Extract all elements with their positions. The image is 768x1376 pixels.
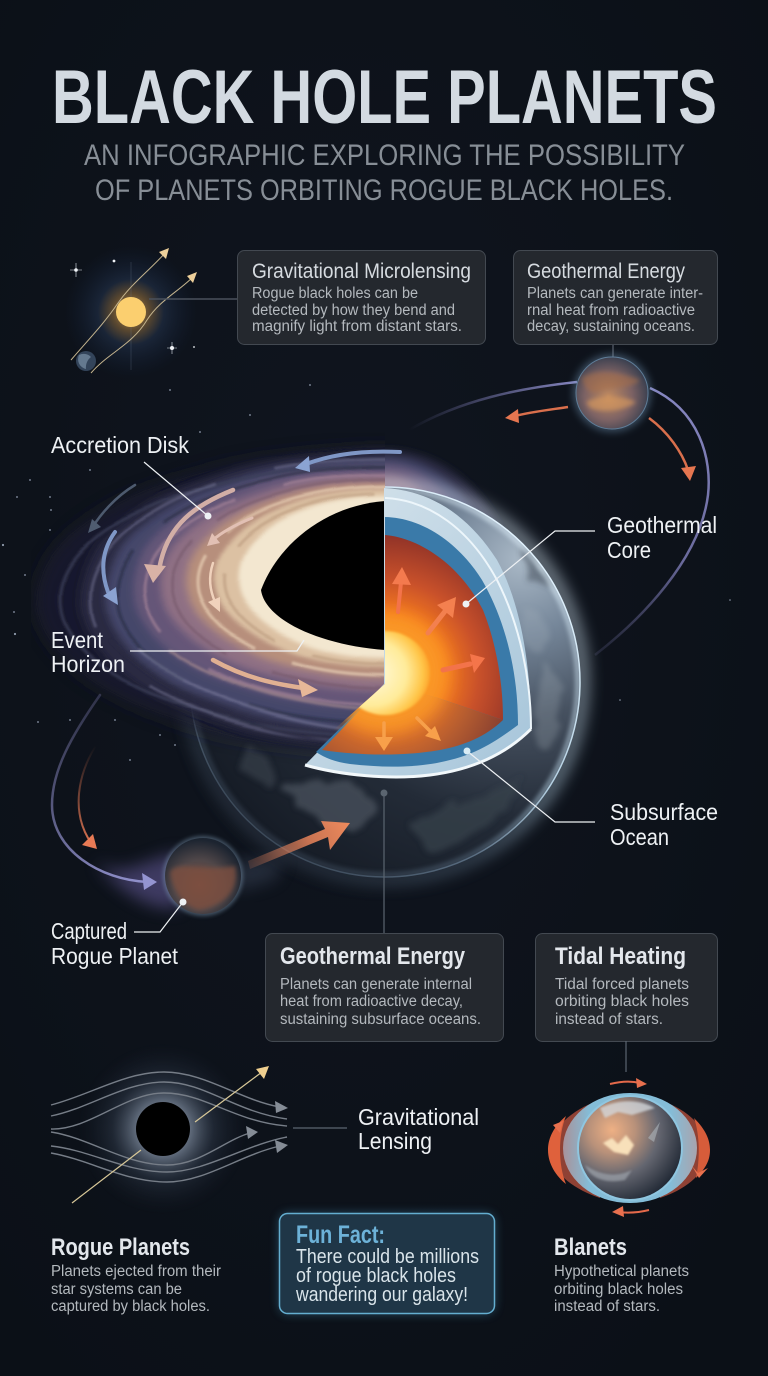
label: captured rogue planet: [51, 898, 186, 969]
panel: blanets: orbiting black holes: [554, 1281, 683, 1298]
label: event horizon: Event: [51, 627, 104, 653]
panel: tidal heating: instead of stars.: [555, 1011, 663, 1028]
arrows: core heat radiating: [375, 567, 485, 751]
panel: geothermal energy lower: Planets can generate internal: [280, 976, 472, 993]
panel: geothermal energy lower: [266, 934, 504, 1042]
cutaway: planet interior: [305, 488, 531, 777]
icon: upper planet: [573, 354, 651, 432]
panel: rogue planets: Rogue Planets: [51, 1234, 190, 1261]
panel: blanets: Blanets: [554, 1234, 627, 1261]
panel: fun fact: of rogue black holes: [296, 1265, 456, 1287]
label: subsurface ocean: Subsurface: [610, 799, 718, 825]
leader: star diagram to microlensing panel: [149, 298, 237, 300]
panel: fun fact: wandering our galaxy!: [295, 1284, 468, 1306]
leader: planet to geothermal panel: [380, 790, 388, 933]
background stars: [2, 384, 731, 761]
orbit: purple orbit around black hole: [409, 382, 709, 655]
panel: gravitational microlensing: [238, 250, 486, 344]
panel: fun fact: There could be millions: [296, 1246, 479, 1268]
panel: rogue planets: star systems can be: [51, 1281, 182, 1298]
subtitle: OF PLANETS ORBITING ROGUE BLACK HOLES.: [95, 174, 673, 207]
leader: gravitational lensing: [293, 1127, 347, 1129]
panel: tidal heating: Tidal Heating: [555, 943, 686, 970]
panel: gravitational microlensing: Rogue black holes can be: [252, 285, 418, 302]
panel: gravitational microlensing: detected by how they bend and: [252, 302, 455, 319]
label: event horizon: Horizon: [51, 651, 125, 677]
panel: geothermal energy lower: Geothermal Energy: [280, 943, 466, 970]
panel: tidal heating: orbiting black holes: [555, 993, 689, 1010]
disk back: faint part behind the planet: [385, 448, 498, 522]
panel: rogue planets: [51, 1234, 221, 1315]
arrow: big orange capture arrow: [248, 821, 350, 869]
label: geothermal core: Core: [607, 537, 651, 563]
label: gravitational lensing: Lensing: [358, 1128, 432, 1154]
label: accretion disk: [51, 432, 212, 520]
subsurface ocean: [316, 517, 518, 767]
icon: tidally heated blanet: [548, 1078, 710, 1217]
label: geothermal core: Geothermal: [607, 512, 717, 538]
diagram: gravitational lensing: [51, 1044, 288, 1214]
label: captured rogue planet: Captured: [51, 918, 127, 944]
panel: blanets: instead of stars.: [554, 1298, 660, 1315]
mantle: [385, 535, 503, 720]
arrows: orange around upper planet: [505, 407, 696, 481]
panel: tidal heating: Tidal forced planets: [555, 976, 689, 993]
accretion disk: [34, 446, 385, 750]
label: gravitational lensing: [358, 1104, 479, 1154]
orbit: capture path: [52, 695, 157, 890]
crust highlight lines: [385, 498, 531, 729]
label: event horizon: [51, 627, 304, 677]
label: subsurface ocean: Ocean: [610, 824, 669, 850]
panel: geothermal energy upper: Geothermal Energy: [527, 260, 685, 283]
panel: rogue planets: Planets ejected from their: [51, 1263, 221, 1280]
panel: blanets: Hypothetical planets: [554, 1263, 689, 1280]
panel: geothermal energy upper: Planets can generate inter-: [527, 285, 703, 302]
icon: microlensing star diagram: [65, 246, 197, 378]
panel: geothermal energy upper: rnal heat from radioactive: [527, 302, 695, 319]
panel: gravitational microlensing: Gravitational Microlensing: [252, 260, 471, 283]
leader: tidal panel to blanet: [625, 1041, 627, 1072]
outer crust: [305, 488, 531, 776]
panel: gravitational microlensing: magnify light from distant stars.: [252, 318, 462, 335]
event horizon: black shape: [261, 501, 385, 650]
leader: panel to upper planet: [612, 345, 614, 358]
label: subsurface ocean: [464, 748, 718, 850]
panel: geothermal energy lower: heat from radioactive decay,: [280, 993, 463, 1010]
panel: geothermal energy lower: sustaining subsurface oceans.: [280, 1011, 481, 1028]
panel: fun fact: [279, 1213, 495, 1314]
panel: blanets: [554, 1234, 689, 1315]
label: geothermal core: [462, 512, 717, 608]
subtitle: AN INFOGRAPHIC EXPLORING THE POSSIBILITY: [84, 139, 685, 172]
core: [321, 613, 449, 733]
panel: geothermal energy upper: [514, 250, 718, 344]
label: captured rogue planet: Rogue Planet: [51, 943, 179, 969]
panel: geothermal energy upper: decay, sustaining oceans.: [527, 318, 695, 335]
panel: fun fact: Fun Fact:: [296, 1221, 385, 1249]
arrows: accretion disk flow: [88, 452, 400, 697]
icon: captured rogue planet with tail: [95, 836, 285, 916]
panel: rogue planets: captured by black holes.: [51, 1298, 210, 1315]
lower mantle wedge: [322, 684, 503, 755]
panel: tidal heating: [536, 934, 718, 1042]
label: accretion disk: Accretion Disk: [51, 432, 189, 458]
label: gravitational lensing: Gravitational: [358, 1104, 479, 1130]
planet: large sphere: [188, 485, 582, 879]
subtitle: [84, 139, 685, 207]
